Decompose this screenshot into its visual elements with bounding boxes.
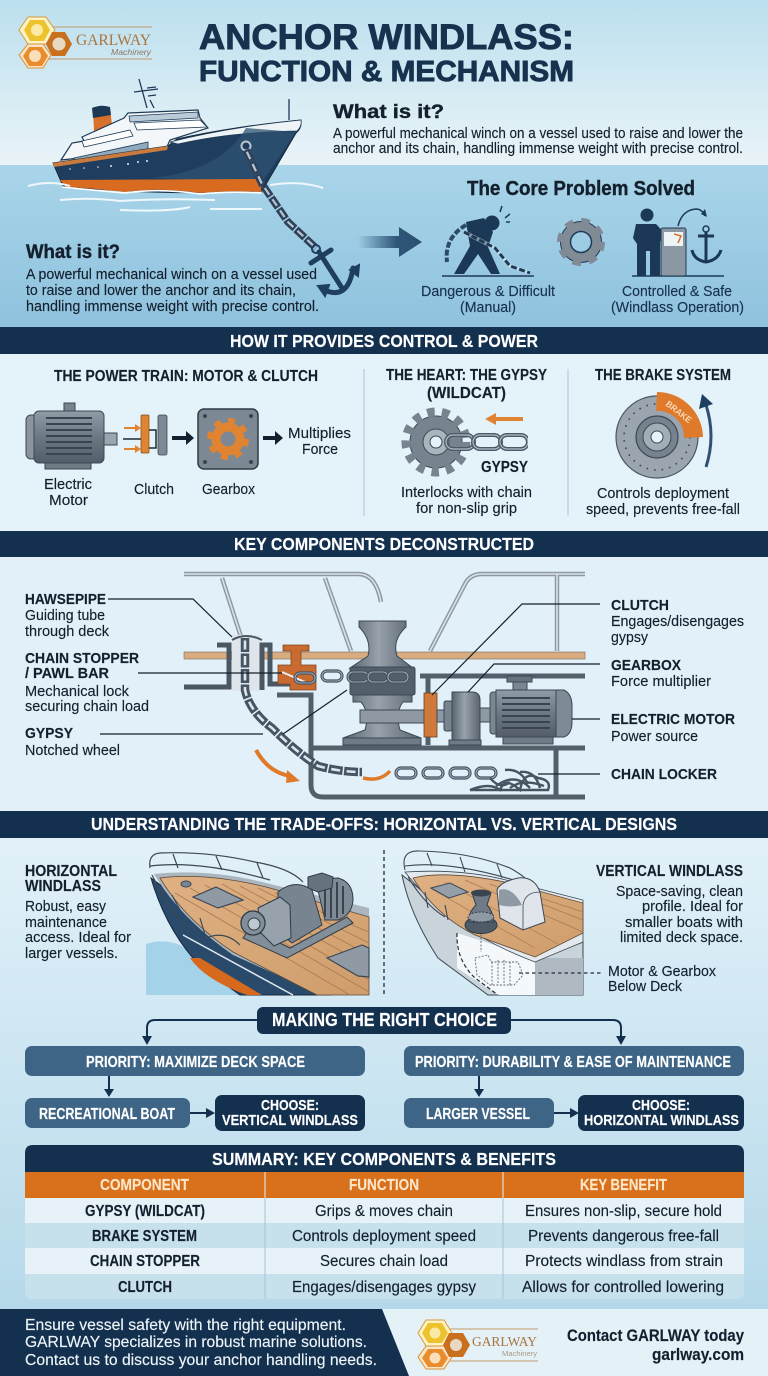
logo: Garlway top: GARLWAY: [76, 32, 151, 49]
label: electric motor: [44, 476, 92, 509]
caption: gypsy: [401, 484, 532, 517]
background: lower page: [0, 838, 768, 1309]
label: gearbox: Force multiplier: [611, 673, 711, 690]
illustration: vertical windlass on bow: [402, 851, 583, 995]
box: choose horizontal: [578, 1095, 744, 1131]
text block: horizontal windlass: access. Ideal for: [25, 929, 131, 946]
text block: vertical windlass: smaller boats with: [625, 914, 743, 931]
illustration: horizontal windlass on bow: [146, 853, 369, 995]
arrow: gearbox to output: [263, 431, 283, 445]
footer: [0, 1309, 768, 1376]
caption: brake: [586, 485, 740, 518]
box: recreational boat: RECREATIONAL BOAT: [39, 1106, 175, 1123]
box: recreational boat: [25, 1098, 190, 1128]
text block: vertical windlass: VERTICAL WINDLASS: [596, 863, 743, 880]
footer contact: Contact GARLWAY today: [567, 1327, 745, 1345]
box: choose vertical: VERTICAL WINDLASS: [222, 1112, 358, 1129]
footer message: Contact us to discuss your anchor handling needs.: [25, 1352, 377, 1369]
arrow: chain direction: [256, 750, 390, 783]
caption: gypsy: Interlocks with chain: [401, 484, 532, 501]
hawsepipe: [184, 635, 316, 691]
callout lines: [100, 599, 600, 774]
text block: what is it (lower): handling immense weight with precise control.: [26, 298, 319, 315]
chain: [245, 638, 496, 778]
text block: horizontal windlass: maintenance: [25, 914, 107, 931]
icon: controlled operation: [632, 208, 724, 276]
background: sky: [0, 0, 768, 165]
section band: key components: [0, 531, 768, 557]
caption: windlass: Controlled & Safe: [622, 283, 732, 300]
chain stopper: [278, 645, 316, 690]
caption: brake: speed, prevents free-fall: [586, 501, 740, 518]
title: ANCHOR WINDLASS:: [199, 18, 574, 57]
caption: manual: Dangerous & Difficult: [421, 283, 556, 300]
table header: COMPONENT: [100, 1177, 189, 1194]
label: gearbox: [611, 657, 711, 690]
label: gearbox: GEARBOX: [611, 657, 681, 674]
label: electric motor: Motor: [49, 492, 88, 509]
background: sea: [0, 165, 768, 327]
label: chain stopper: [25, 650, 149, 715]
illustration: anchor: [311, 245, 359, 296]
text block: what is it (lower): to raise and lower the anchor and its chain,: [26, 282, 296, 299]
callout: motor and gearbox below deck: Motor & Gearbox: [608, 963, 716, 980]
icon: brake disc: [616, 392, 713, 478]
railing: [184, 574, 585, 651]
title: FUNCTION & MECHANISM: [199, 56, 574, 88]
table row: clutch: [118, 1279, 724, 1296]
caption: manual: [421, 283, 556, 316]
label: chain stopper: securing chain load: [25, 698, 149, 715]
text block: horizontal windlass: HORIZONTAL: [25, 863, 117, 880]
heading: gypsy: [386, 367, 548, 402]
box: choose horizontal: CHOOSE:: [632, 1097, 690, 1114]
label: clutch: Clutch: [134, 481, 174, 498]
text block: horizontal windlass: Robust, easy: [25, 898, 106, 915]
arrow: clutch to gearbox: [172, 431, 194, 445]
divider: [383, 850, 385, 995]
caption: windlass: (Windlass Operation): [611, 299, 744, 316]
logo: Garlway footer: Machinery: [502, 1351, 538, 1358]
logo: Garlway top: [19, 17, 152, 68]
windlass drum and base: [343, 621, 424, 745]
text block: horizontal windlass: WINDLASS: [25, 878, 101, 895]
label: gypsy: GYPSY: [25, 725, 73, 742]
caption: brake: Controls deployment: [597, 485, 730, 502]
illustration: anchor chain: [246, 150, 316, 248]
section band: key components: KEY COMPONENTS DECONSTRUCTED: [234, 534, 534, 554]
icon: electric motor: [26, 403, 117, 469]
box: priority deck space: [25, 1046, 365, 1076]
heading box: [257, 1007, 511, 1034]
footer message: GARLWAY specializes in robust marine solutions.: [25, 1334, 367, 1351]
text block: what is it (lower): What is it?: [26, 241, 120, 263]
heading: gypsy: (WILDCAT): [427, 385, 506, 402]
label: multiplies force: Force: [302, 441, 338, 458]
logo: Garlway top: Machinery: [111, 48, 152, 57]
footer contact: [567, 1327, 745, 1364]
box: choose vertical: [215, 1095, 365, 1131]
label: electric motor: Electric: [44, 476, 92, 493]
box: choose horizontal: HORIZONTAL WINDLASS: [584, 1112, 739, 1129]
icon: brake disc: BRAKE: [664, 399, 694, 425]
label: hawsepipe: through deck: [25, 623, 109, 640]
deck: [184, 652, 585, 659]
label: electric motor: [611, 711, 735, 745]
table row: clutch: CLUTCH: [118, 1279, 172, 1296]
heading: power train: THE POWER TRAIN: MOTOR & CLUTCH: [54, 368, 318, 385]
icon: gearbox: [198, 409, 258, 469]
heading: core problem: The Core Problem Solved: [467, 178, 695, 200]
heading box: MAKING THE RIGHT CHOICE: [272, 1010, 497, 1030]
footer message: [25, 1317, 377, 1369]
table row: brake: Prevents dangerous free-fall: [528, 1228, 719, 1245]
table row: brake: BRAKE SYSTEM: [92, 1228, 197, 1245]
table row: brake: [92, 1228, 719, 1245]
caption: manual: (Manual): [460, 299, 516, 316]
lower frame: [277, 676, 585, 797]
logo: Garlway footer: GARLWAY: [472, 1335, 537, 1350]
icon: gear: [560, 221, 602, 263]
table row: gypsy: Ensures non-slip, secure hold: [525, 1203, 722, 1220]
text block: horizontal windlass: [25, 863, 131, 962]
label: multiplies force: [288, 425, 351, 458]
label: gypsy: GYPSY: [481, 459, 529, 476]
logo: Garlway footer: [418, 1320, 538, 1369]
section band: control and power: [0, 327, 768, 354]
chain pile: [470, 770, 549, 790]
footer message: Ensure vessel safety with the right equipment.: [25, 1317, 346, 1334]
label: clutch: CLUTCH: [611, 597, 669, 614]
section band: control and power: HOW IT PROVIDES CONTROL & POWER: [230, 331, 538, 351]
box: priority deck space: PRIORITY: MAXIMIZE DECK SPACE: [86, 1054, 305, 1071]
box: priority durability: [404, 1046, 744, 1076]
heading: brake: THE BRAKE SYSTEM: [595, 367, 731, 384]
text block: what is it (top): What is it?: [333, 101, 444, 123]
table row: chain stopper: Protects windlass from strain: [525, 1253, 723, 1270]
table header: [100, 1177, 667, 1194]
label: chain locker: CHAIN LOCKER: [611, 766, 717, 783]
table row: chain stopper: CHAIN STOPPER: [90, 1253, 200, 1270]
footer contact: garlway.com: [652, 1346, 744, 1364]
label: hawsepipe: HAWSEPIPE: [25, 591, 106, 608]
arrows: branches: [109, 1020, 621, 1113]
text block: vertical windlass: profile. Ideal for: [642, 898, 743, 915]
text block: what is it (lower): A powerful mechanical winch on a vessel used: [26, 266, 317, 283]
caption: windlass: [611, 283, 744, 316]
table row: gypsy: Grips & moves chain: [315, 1203, 453, 1220]
caption: gypsy: for non-slip grip: [416, 500, 517, 517]
table row: clutch: Engages/disengages gypsy: [292, 1279, 476, 1296]
clutch: [424, 693, 437, 737]
icon: gypsy wheel and chain: [406, 412, 534, 472]
table: summary: [25, 1145, 744, 1299]
label: electric motor: Power source: [611, 728, 698, 745]
text block: vertical windlass: [596, 863, 743, 946]
label: gypsy: [25, 725, 120, 759]
box: choose vertical: CHOOSE:: [261, 1097, 319, 1114]
table header: KEY BENEFIT: [580, 1177, 667, 1194]
table row: chain stopper: [90, 1253, 723, 1270]
label: chain stopper: / PAWL BAR: [25, 665, 109, 682]
label: gypsy: Notched wheel: [25, 742, 120, 759]
callout: motor and gearbox below deck: [519, 963, 716, 995]
box: larger vessel: LARGER VESSEL: [426, 1106, 530, 1123]
heading: gypsy: THE HEART: THE GYPSY: [386, 367, 548, 384]
label: gearbox: Gearbox: [202, 481, 255, 498]
table row: brake: Controls deployment speed: [292, 1228, 476, 1245]
table row: chain stopper: Secures chain load: [320, 1253, 448, 1270]
text block: what is it (top): [333, 101, 743, 157]
table row: gypsy: [85, 1203, 722, 1220]
label: hawsepipe: Guiding tube: [25, 607, 105, 624]
text block: vertical windlass: limited deck space.: [620, 929, 743, 946]
label: clutch: Engages/disengages: [611, 613, 744, 630]
label: chain stopper: CHAIN STOPPER: [25, 650, 139, 667]
label: electric motor: ELECTRIC MOTOR: [611, 711, 735, 728]
table row: clutch: Allows for controlled lowering: [522, 1279, 724, 1296]
icon: clutch: [123, 415, 167, 455]
electric motor: [490, 676, 572, 744]
table header: FUNCTION: [349, 1177, 419, 1194]
icon: manual chain hauling: [442, 206, 534, 276]
table row: gypsy: GYPSY (WILDCAT): [85, 1203, 205, 1220]
text block: what is it (lower): [26, 241, 319, 315]
panel: control and power: [0, 354, 768, 531]
diagram: windlass cross-section: [184, 574, 585, 797]
label: multiplies force: Multiplies: [288, 425, 351, 442]
text block: horizontal windlass: larger vessels.: [25, 945, 118, 962]
table title: SUMMARY: KEY COMPONENTS & BENEFITS: [212, 1149, 556, 1169]
label: chain stopper: Mechanical lock: [25, 683, 129, 700]
illustration: ship: [28, 79, 323, 211]
text block: vertical windlass: Space-saving, clean: [616, 883, 743, 900]
section band: trade-offs: [0, 811, 768, 838]
title: [199, 18, 574, 88]
arrow: problem to solution: [358, 227, 422, 257]
panel: key components: [0, 557, 768, 811]
label: hawsepipe: [25, 591, 109, 640]
label: clutch: gypsy: [611, 629, 648, 646]
gearbox: [437, 692, 490, 745]
box: larger vessel: [404, 1098, 554, 1128]
flowchart: making the right choice: [25, 1007, 744, 1131]
section band: trade-offs: UNDERSTANDING THE TRADE-OFFS: HORIZONTAL VS. VERTICAL DESIGNS: [91, 814, 677, 834]
callout: motor and gearbox below deck: Below Deck: [608, 978, 682, 995]
label: clutch: [611, 597, 744, 646]
